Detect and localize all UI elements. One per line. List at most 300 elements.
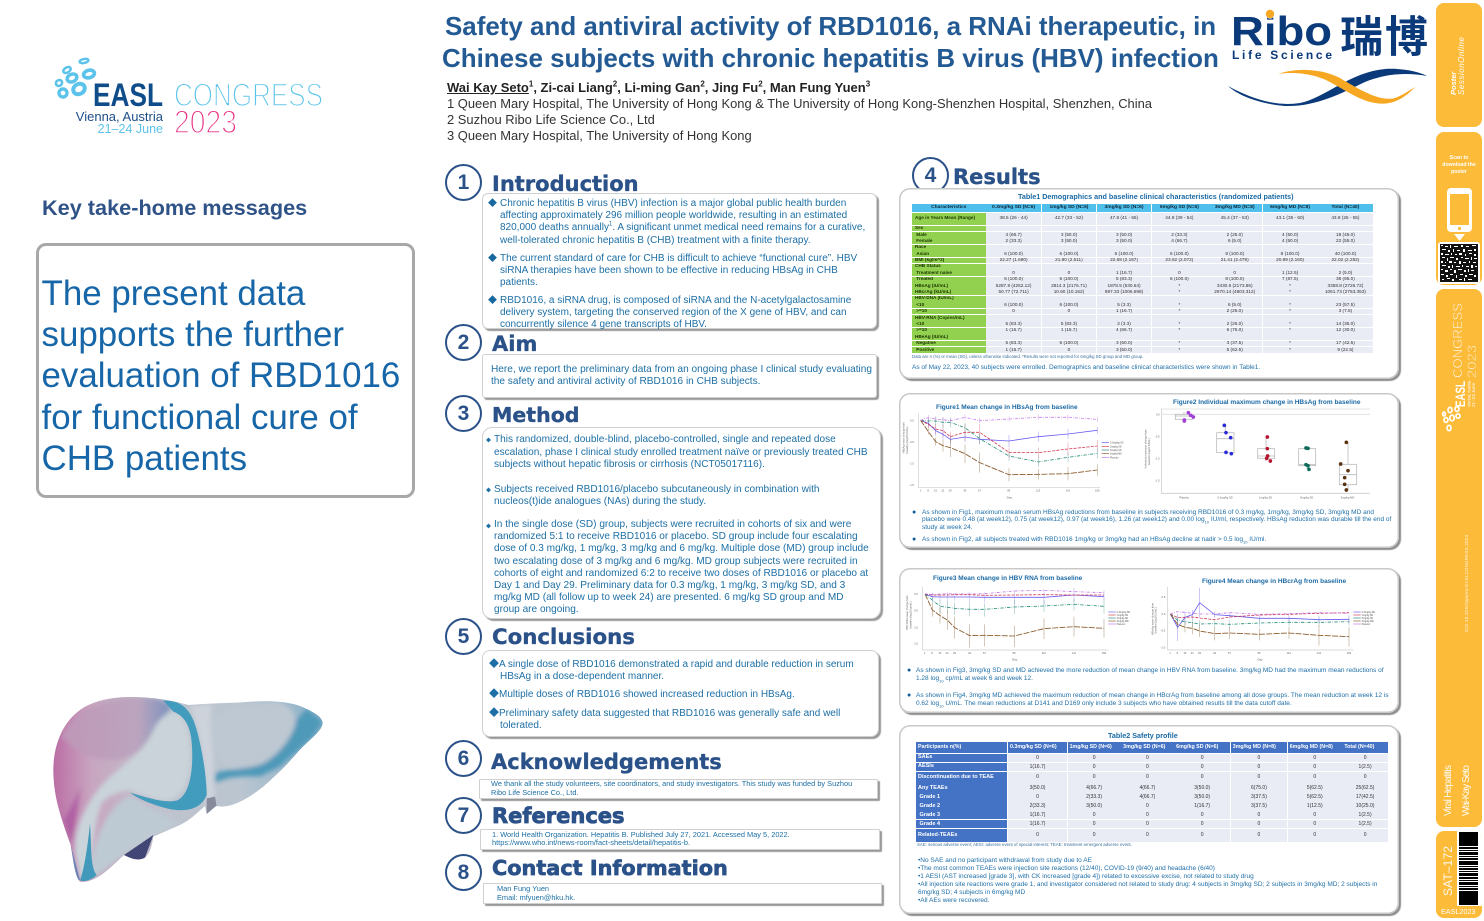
figure 3 title: Figure3 Mean change in HBV RNA from baseline: [933, 575, 1082, 582]
aim text: the safety and antiviral activity of RBD1016 in CHB subjects.: [491, 376, 760, 387]
bullet text: figure 4: ●: [907, 692, 911, 699]
bullet text: figure 3: ●: [907, 667, 911, 674]
take-home text: for functional cure of: [42, 398, 358, 437]
figure 1 title: Figure1 Mean change in HBsAg from baseline: [936, 404, 1078, 411]
category and author: Viral Hepatitis: [1443, 765, 1454, 816]
table 2: 0: [1201, 764, 1204, 770]
table 2: 0: [1093, 832, 1095, 838]
chart: figure 3 line chart: 22: [946, 651, 949, 655]
side panel: scan to download: [1436, 132, 1482, 285]
table 2: 3(50.0): [1086, 803, 1102, 809]
chart: figure 2 box plot: baseline (log10 IU/mL): [1147, 438, 1151, 465]
chart: figure 3 line chart: HBV RNA mean change from: [905, 595, 909, 630]
acknowledgements text: Ribo Life Science Co., Ltd.: [491, 788, 579, 797]
scan caption: poster: [1451, 169, 1467, 175]
table 2: 0: [1036, 832, 1039, 838]
table 1: 43.1 (35 - 50): [1276, 215, 1304, 220]
chart: figure 1 line chart: 29: [949, 489, 952, 493]
bullet text: [500, 295, 851, 330]
acknowledgements text: We thank all the study volunteers, site coordinators, and study investigators. This study was funded by Suzhou: [491, 779, 852, 788]
bullet text: well-tolerated chronic hepatitis B (CHB) treatment with a finite therapy.: [500, 235, 811, 246]
table 2: 0: [1258, 764, 1260, 770]
table 2: 3(50.0): [1030, 785, 1045, 791]
barcode bars: [1459, 832, 1478, 905]
table 2: 0: [1313, 764, 1316, 770]
table 2: 0: [1146, 812, 1149, 818]
table 2: 1(2.5): [1359, 812, 1372, 818]
panel: HBV RNA and HBcrAg figures: [899, 568, 1399, 713]
table 1: [912, 204, 1373, 353]
bullet text: [500, 198, 865, 246]
section number 3: 3: [458, 402, 469, 425]
chart: figure 3 line chart: 169: [1102, 651, 1107, 655]
table 2: 0: [1093, 755, 1095, 761]
logo: Ribo Life Science: [1228, 3, 1428, 106]
table 2: 6(75.0): [1251, 785, 1267, 791]
affiliations: 3 Queen Mary Hospital, The University of Hong Kong: [447, 128, 752, 143]
chart: figure 3 line chart: baseline (log10 cp/mL): [908, 601, 912, 628]
table 2: SAEs: [918, 754, 932, 760]
bullet text: RBD1016, a siRNA drug, is composed of siRNA and the N-acetylgalactosamine: [500, 295, 851, 306]
table 2: 5(62.5): [1307, 794, 1323, 800]
section number 3: [445, 395, 482, 432]
congress branding: 2023: [1467, 345, 1479, 378]
table 2: 0: [1313, 812, 1316, 818]
bullet text: 820,000 deaths annually1. A significant unmet medical need remains for a curative,: [500, 222, 865, 233]
EASL2023 label: EASL2023: [1441, 907, 1475, 916]
figure 2 title: Figure2 Individual maximum change in HBsAg from baseline: [1173, 399, 1360, 406]
chart: figure 1 line chart: -0.5: [909, 440, 914, 444]
poster session online label: SessionOnline: [1457, 36, 1466, 95]
panel: method: ◆: [486, 524, 491, 530]
logo: EASL Congress 2023: 2023: [174, 104, 237, 140]
title line 1: Safety and antiviral activity of RBD1016, a RNAi therapeutic, in: [445, 13, 1216, 41]
chart: figure 3 line chart: 43: [968, 651, 971, 655]
table 1: 1mg/kg SD (N=6): [1049, 205, 1088, 210]
table 2: 3(37.5): [1251, 794, 1267, 800]
table title: Table1 Demographics and baseline clinical characteristics (randomized patients): [1018, 192, 1293, 201]
category and author: [1443, 765, 1472, 816]
safety summary text: •The most common TEAEs were injection site reactions (12/40), COVID-19 (9/40) and headache (6/40): [918, 865, 1215, 872]
chart: figure 2 box plot: Individual maximum change from: [1144, 429, 1148, 468]
chart: figure 4 line chart: 113: [1287, 651, 1291, 655]
chart: figure 1 line chart: 15: [934, 489, 937, 493]
panel: method: subjects without hepatic fibrosis or cirrhosis (NCT05017116).: [494, 459, 765, 470]
bullet text: figures 1 and 2: placebo were 0.48 (at week12), 0.75 (at week12), 0.97 (at week16), 1.26 (at week12) and 0.00 log10 IU/ml, respectively. HBsAg reduction was durable till the end of: [922, 516, 1391, 524]
panel: method: ◆: [486, 488, 491, 494]
chart: figure 1 line chart: 85: [1007, 489, 1011, 493]
bullet text: delivery system, targeting the conserved region of the X gene of HBV, and can: [500, 307, 847, 318]
chart: figure 3 line chart: 1mg/kg SD: [1117, 615, 1129, 617]
chart: figure 2 box plot: 3mg/kg MD: [1341, 495, 1354, 499]
logo: EASL Congress 2023: [54, 58, 323, 140]
section number 2: 2: [458, 331, 469, 354]
chart: figure 3 line chart: 0.3mg/kg SD: [1117, 612, 1130, 614]
bullet icon: ◆: [488, 198, 497, 208]
table 2: 0: [1201, 774, 1204, 780]
table 2: 3(50.0): [1194, 794, 1210, 800]
chart: figure 3 line chart: Placebo: [1117, 624, 1126, 626]
table 2: 1(16.7): [1030, 764, 1045, 770]
chart: figure 1 line chart: 3mg/kg SD: [1110, 450, 1122, 452]
side panel: poster session online: [1436, 3, 1482, 127]
bullet text: figures 1 and 2: ●: [912, 508, 916, 516]
table 2: 0: [1201, 755, 1204, 761]
table 2: 0: [1036, 794, 1039, 800]
chart: figure 3 line chart: 3mg/kg MD: [1117, 621, 1129, 623]
chart: figure 1 line chart: 0.0: [910, 418, 914, 422]
chart: figure 1 line chart: 1mg/kg SD: [1110, 446, 1122, 448]
table 2: Grade 1: [920, 794, 940, 800]
table 2: 0: [1146, 803, 1149, 809]
safety summary text: •1 AESI (AST increased [grade 3], with CK increased [grade 4]) related to excessive excise, not related to study drug: [918, 873, 1254, 880]
bullet text: siRNA therapies have been shown to be effective in reducing HBsAg in CHB: [500, 265, 838, 276]
chart: figure 3 line chart: 29: [953, 651, 956, 655]
table 2: 0: [1364, 832, 1366, 838]
table 2: 1(16.7): [1194, 803, 1210, 809]
chart: figure 2 box plot: 0.0: [1156, 412, 1160, 416]
table 2: 0: [1258, 755, 1260, 761]
panel: references: [480, 829, 880, 850]
table 2: 0: [1258, 812, 1260, 818]
chart: figure 4 line chart: 3mg/kg SD: [1362, 618, 1374, 620]
section number 4: [912, 157, 949, 194]
method bullets: [486, 434, 869, 615]
chart: figure 4 line chart: 43: [1213, 651, 1216, 655]
chart: figure 3 line chart: 0.0: [914, 592, 918, 596]
chart: figure 4 line chart: HBcrAg mean change from: [1150, 602, 1154, 635]
chart: figure 1 line chart: 169: [1095, 489, 1100, 493]
table 1: 3mg/kg SD (N=6): [1105, 205, 1144, 210]
contact text: Email: mfyuen@hku.hk.: [497, 893, 575, 902]
section number 6: 6: [458, 747, 469, 770]
table 2: 0: [1036, 774, 1039, 780]
table 2: 1mg/kg SD (N=6): [1070, 744, 1112, 750]
table 2: 0: [1364, 774, 1366, 780]
chart: figure 3 line chart: 141: [1072, 651, 1077, 655]
chart: figure 4 line chart: 1mg/kg SD: [1362, 615, 1374, 617]
safety summary text: •No SAE and no participant withdrawal from study due to AE: [918, 857, 1092, 864]
chart: figure 3 line chart: -1.5: [913, 641, 918, 645]
chart: figure 3 line chart: -1.0: [913, 625, 918, 629]
conclusions text: [489, 658, 854, 731]
table 2: 2(33.3): [1030, 803, 1045, 809]
take-home text: evaluation of RBD1016: [42, 356, 400, 395]
scan caption: [1442, 155, 1476, 175]
table 2: 4(66.7): [1139, 794, 1155, 800]
safety summary text: 6mg/kg SD; 4 subjects in 6mg/kg MD: [918, 889, 1025, 896]
table 2: 0: [1201, 821, 1204, 827]
bullet text: figure 3: [907, 667, 1384, 683]
take-home text: supports the further: [42, 315, 344, 354]
chart: figure 4 line chart: -0.5: [1161, 629, 1166, 633]
table 2: 1(2.5): [1359, 764, 1372, 770]
table 2: 5(62.5): [1307, 785, 1323, 791]
bullet text: figures 1 and 2: As shown in Fig1, maximum mean serum HBsAg reductions from baseline in subjects receiving RBD1016 of 0.3 mg/kg, 1mg/kg, 3mg/kg SD, 3mg/kg MD and: [922, 508, 1374, 516]
table 2: 4(66.7): [1139, 785, 1155, 791]
table 2: 0: [1146, 764, 1149, 770]
table 1: 42.7 (33 - 52): [1055, 215, 1083, 220]
chart: figure 1 line chart: Placebo: [1110, 457, 1119, 459]
table 2: 1(16.7): [1030, 821, 1045, 827]
congress branding: 21–24 June: [1471, 382, 1476, 407]
chart: figure 3 line chart: 57: [983, 651, 986, 655]
panel: aim: [482, 354, 877, 398]
chart: figure 3 line chart: [905, 587, 1130, 661]
table 1: 38.5 (26 - 44): [1000, 215, 1028, 220]
table 2: Grade 3: [920, 812, 940, 818]
table 2: 0: [1313, 821, 1316, 827]
section number 1: [445, 164, 482, 201]
affiliations: [447, 96, 1152, 143]
contact text: Man Fung Yuen: [497, 884, 549, 893]
side panel: poster number and barcode: [1436, 831, 1482, 918]
heading: acknowledgements: Acknowledgements: [491, 750, 722, 774]
panel: acknowledgements: [479, 779, 878, 799]
heading: introduction: Introduction: [492, 172, 639, 196]
bullet text: affecting approximately 296 million people worldwide, resulting in an estimated: [500, 210, 847, 221]
panel: method: cohorts of eight and randomized 6:2 to receive two doses of RBD1016 or placebo at: [494, 568, 868, 579]
table 2: 1(2.5): [1359, 821, 1372, 827]
table 2: 1(16.7): [1030, 812, 1045, 818]
acknowledgements text: [491, 779, 852, 797]
panel: method: [482, 427, 881, 619]
section number 8: 8: [458, 861, 469, 884]
chart: figure 1 line chart: -1.0: [909, 461, 914, 465]
chart: figure 3 line chart: 15: [938, 651, 942, 655]
chart: figure 1 line chart: [902, 413, 1124, 500]
bullet text: figure 4: As shown in Fig4, 3mg/kg MD achieved the maximum reduction of mean change in HBcrAg from baseline among all dose groups. The mean reduction at week 12 is: [916, 692, 1388, 699]
table 2: 6mg/kg SD (N=6): [1176, 744, 1218, 750]
table 2: 3(37.5): [1251, 803, 1267, 809]
heading: conclusions: Conclusions: [492, 625, 635, 650]
table 1: 3mg/kg MD (N=8): [1215, 205, 1255, 210]
table footnote: SAE: serious adverse event; AESI: adverse event of special interest; TEAE: treatment emergent adverse event.: [917, 842, 1132, 847]
bullet icon: ◆: [488, 253, 497, 263]
panel: method: Subjects received RBD1016/placebo subcutaneously in combination with: [494, 484, 820, 494]
table 2: Participants n(%): [918, 744, 961, 750]
scan caption: Scan to: [1450, 155, 1468, 161]
panel: introduction: [482, 193, 877, 329]
table 2: 0: [1146, 774, 1149, 780]
results text: As of May 22, 2023, 40 subjects were enrolled. Demographics and baseline clinical characteristics were shown in Table1.: [912, 364, 1260, 371]
chart: figure 4 line chart: 141: [1317, 651, 1322, 655]
table 2: 0: [1313, 832, 1316, 838]
chart: figure 4 line chart: -1.0: [1161, 645, 1166, 649]
table 2: 0: [1093, 821, 1095, 827]
chart: figure 4 line chart: [1150, 587, 1375, 661]
bullet text: patients.: [500, 277, 538, 288]
chart: figure 4 line chart: 169: [1347, 651, 1352, 655]
table 2: 0: [1201, 832, 1204, 838]
table 2: Total (N=40): [1344, 744, 1374, 750]
chart: figure 4 line chart: 3mg/kg MD: [1362, 621, 1374, 623]
table 2: 0: [1313, 774, 1316, 780]
panel: method: dose of 0.3 mg/kg, 1 mg/kg, 3 mg/kg and 6 mg/kg. Multiple dose (MD) group include: [494, 543, 869, 554]
bullet text: figure 2: As shown in Fig2, all subjects treated with RBD1016 1mg/kg or 3mg/kg had an HBsAg decline at nadir > 0.5 log10 IU/ml.: [922, 536, 1266, 544]
safety summary text: •All AEs were recovered.: [918, 897, 989, 904]
panel: method: This randomized, double-blind, placebo-controlled, single and repeated dose: [494, 434, 836, 445]
chart: figure 1 line chart: baseline (log10 IU/mL): [905, 426, 909, 453]
chart: figure 4 line chart: 0.0: [1162, 612, 1166, 616]
title line 2: Chinese subjects with chronic hepatitis B virus (HBV) infection: [442, 45, 1219, 73]
chart: figure 1 line chart: 57: [978, 489, 981, 493]
logo: EASL Congress 2023: EASL: [93, 77, 163, 113]
logo: EASL Congress 2023: 21–24 June: [98, 122, 163, 136]
panel: conclusions: ◆Preliminary safety data suggested that RBD1016 was generally safe and well: [489, 708, 840, 718]
panel: method: nucleos(t)ide analogues (NAs) during the study.: [494, 496, 706, 507]
bullet text: [500, 252, 858, 288]
panel: method: escalation, phase I clinical study enrolled treatment naïve or previously treated CHB: [494, 446, 868, 458]
panel: method: randomized 5:1 to receive RBD1016 or placebo. SD group include four escalating: [494, 531, 858, 542]
panel: conclusions: ◆Multiple doses of RBD1016 showed increased reduction in HBsAg.: [489, 688, 795, 700]
heading: aim: Aim: [492, 332, 537, 356]
section number 8: [445, 854, 482, 891]
section number 6: [445, 740, 482, 777]
table 2: 17(42.5): [1356, 794, 1374, 800]
chart: figure 1 line chart: 1: [920, 489, 922, 493]
table 1: 47.8 (41 - 55): [1110, 215, 1138, 220]
heading: references: References: [492, 804, 625, 828]
bullet text: figure 3: 1.28 log10 cp/mL at week 6 and week 12.: [916, 675, 1033, 683]
title: [442, 13, 1219, 73]
take-home text: CHB patients: [42, 439, 247, 478]
panel: method: mg/kg MD (all follow up to week 24) are presented. 6 mg/kg SD group and MD: [494, 592, 844, 603]
table 2: Related-TEAEs: [918, 832, 957, 838]
logo: EASL Congress 2023: CONGRESS: [174, 77, 323, 113]
section number 7: 7: [458, 804, 469, 827]
heading: results: Results: [953, 165, 1041, 189]
poster session online label: [1449, 36, 1466, 95]
references text: [492, 830, 790, 847]
chart: figure 3 line chart: 113: [1042, 651, 1046, 655]
chart: figure 2 box plot: Placebo: [1179, 495, 1189, 499]
bullet text: figure 4: 0.62 log10 U/mL. The mean reductions at D141 and D169 only include 3 subjects who have obtained results till the data cutoff date.: [916, 700, 1292, 708]
chart: figure 4 line chart: Placebo: [1362, 624, 1371, 626]
chart: figure 2 box plot: 0.3mg/kg SD: [1217, 495, 1233, 499]
table title: Table2 Safety profile: [1108, 731, 1178, 740]
scan caption: download the: [1442, 162, 1476, 168]
table 2: 0: [1258, 774, 1260, 780]
section number 4: 4: [925, 164, 936, 187]
chart: figure 4 line chart: 0.5: [1162, 595, 1166, 599]
table 2: 2(33.3): [1086, 794, 1102, 800]
table 2: Any TEAEs: [918, 785, 948, 791]
chart: figure 4 line chart: 15: [1183, 651, 1187, 655]
chart: figure 3 line chart: 3mg/kg SD: [1117, 618, 1129, 620]
chart: figure 4 line chart: 1: [1169, 651, 1171, 655]
table 2: 0: [1258, 832, 1260, 838]
table 2: 0: [1036, 755, 1039, 761]
panel: contact information: [483, 883, 882, 904]
panel: method: Day 1 and Day 29. Preliminary data for 0.3 mg/kg, 1 mg/kg, 3 mg/kg SD, and 3: [494, 580, 845, 591]
poster session online label: Poster: [1449, 71, 1458, 95]
barcode: [1457, 831, 1482, 906]
table 2: 0: [1093, 764, 1095, 770]
chart: figure 1 line chart: 141: [1066, 489, 1071, 493]
chart: figure 2 box plot: -1.0: [1155, 456, 1160, 460]
DOI text: DOI:10.3252/pponw.EASLCONGRESS.2023: [1464, 534, 1469, 632]
chart: figure 2 box plot: -0.5: [1155, 434, 1160, 438]
panel: HBsAg figures: [899, 393, 1399, 548]
table 2: 3mg/kg SD (N=6): [1123, 744, 1165, 750]
aim text: [491, 364, 872, 387]
panel: method: two escalating dose of 3 mg/kg and 6 mg/kg. MD group subjects were recruited in: [494, 556, 858, 567]
side panel: congress and session: [1436, 289, 1482, 827]
chart: figure 4 line chart: 29: [1198, 651, 1201, 655]
table 2: 0: [1146, 821, 1149, 827]
chart: figure 4 line chart: 22: [1191, 651, 1194, 655]
poster number: SAT–172: [1441, 846, 1455, 896]
table 1: 6mg/kg MD (N=8): [1270, 205, 1310, 210]
chart: figure 1 line chart: 43: [963, 489, 967, 493]
chart: figure 2 box plot: 1mg/kg SD: [1259, 495, 1272, 499]
table 1: Age in Years Mean (Range): [915, 215, 975, 220]
logo: Ribo Life Science: Life Science: [1232, 48, 1332, 62]
chart: figure 1 line chart: 113: [1036, 489, 1041, 493]
table 2: 10(25.0): [1356, 803, 1374, 809]
table 2: 0: [1201, 812, 1204, 818]
table 1: Total (N=40): [1332, 205, 1359, 210]
safety summary text: [918, 857, 1377, 904]
panel: take-home message: [36, 243, 415, 498]
table 2: 1(12.5): [1307, 803, 1323, 809]
table 2: [916, 742, 1388, 842]
table 2: 25(62.5): [1356, 785, 1374, 791]
chart: figure 1 line chart: -1.5: [909, 483, 914, 487]
chart: figure 4 line chart: Day: [1257, 657, 1263, 661]
logo: Ribo Life Science: Ribo: [1231, 8, 1332, 54]
bullet text: figures 1 and 2: study at week 24.: [922, 524, 973, 531]
panel: method: group are ongoing.: [494, 604, 579, 615]
bullet icon: ◆: [488, 295, 497, 305]
table 2: Grade 4: [920, 821, 940, 827]
bullet text: figure 4: [907, 692, 1388, 708]
heading: contact information: Contact Information: [492, 856, 728, 880]
congress branding: EASL: [1453, 381, 1468, 407]
table 2: 6mg/kg MD (N=8): [1290, 744, 1333, 750]
contact text: [497, 884, 575, 902]
section number 1: 1: [458, 171, 469, 194]
heading: key take-home messages: Key take-home messages: [42, 195, 307, 220]
bullet text: figure 2: ●: [912, 536, 916, 542]
table 2: 3(50.0): [1194, 785, 1210, 791]
panel: conclusions: ◆A single dose of RBD1016 demonstrated a rapid and durable reduction in serum: [489, 658, 854, 670]
chart: figure 3 line chart: 85: [1013, 651, 1016, 655]
table 1: 44.8 (39 - 54): [1165, 215, 1193, 220]
bullet text: concurrently silence 4 gene transcripts of HBV.: [500, 319, 707, 330]
table 1: Characteristics: [931, 205, 966, 210]
panel: method: In the single dose (SD) group, subjects were recruited in cohorts of six and were: [494, 519, 851, 530]
table 1: 45.4 (37 - 53): [1221, 215, 1249, 220]
heading: method: Method: [492, 403, 579, 427]
category and author: Wai-Kay Seto: [1461, 765, 1472, 816]
table 2: Grade 2: [920, 803, 940, 809]
take-home text: [42, 274, 400, 478]
table 2: AESIs: [918, 763, 934, 769]
table 2: 0: [1093, 774, 1095, 780]
bullet text: Chronic hepatitis B virus (HBV) infection is a major global public health burden: [500, 198, 846, 209]
references text: 1. World Health Organization. Hepatitis B. Published July 27, 2021. Accessed May 5, 2022.: [492, 830, 790, 839]
chart: figure 1 line chart: 0.3mg/kg SD: [1110, 443, 1124, 445]
section number 7: [445, 797, 482, 834]
table 2: 0: [1313, 755, 1316, 761]
chart: figure 4 line chart: 8: [1177, 651, 1179, 655]
affiliations: 1 Queen Mary Hospital, The University of Hong Kong & The University of Hong Kong-Shenzhen Hospital, Shenzhen, China: [447, 96, 1152, 111]
chart: figure 4 line chart: baseline (log10 U/mL): [1154, 607, 1158, 633]
table 2: 0: [1258, 821, 1260, 827]
chart: figure 3 line chart: -0.5: [913, 609, 918, 613]
